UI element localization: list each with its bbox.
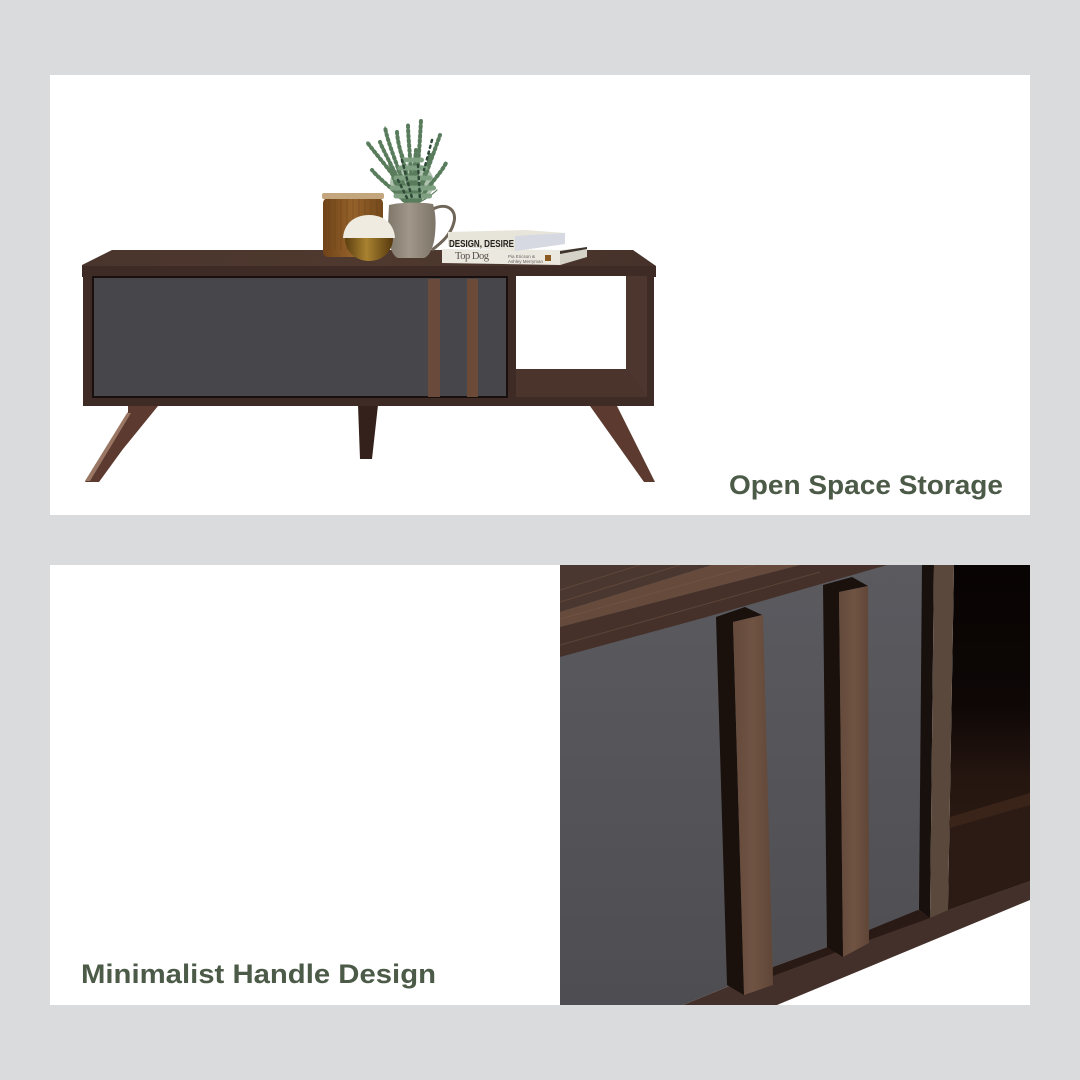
door handles: [428, 279, 478, 397]
caption: open space storage: Open Space Storage: [729, 470, 1003, 500]
caption: minimalist handle design: Minimalist Handle Design: [81, 959, 436, 989]
panel: minimalist handle design: [50, 565, 1030, 1005]
panel: open space storage: [50, 75, 1030, 515]
bottom rail: [683, 881, 1030, 1005]
table legs: [85, 405, 655, 482]
sliding door: [92, 276, 508, 398]
table frame: [83, 276, 654, 406]
table top edge: [560, 565, 887, 657]
close-up photo: [560, 565, 1030, 1005]
book title: Design, Desire: DESIGN, DESIRE: [449, 238, 514, 250]
coffee table: [82, 250, 656, 482]
handle two: [823, 577, 869, 957]
round gold and white vase: [343, 215, 395, 261]
plant: [367, 120, 446, 204]
book title: Top Dog: Top Dog: [455, 251, 490, 262]
table top: [82, 250, 656, 268]
open shelf interior: [948, 565, 1030, 910]
open storage compartment: [516, 276, 647, 397]
gray door surface: [560, 565, 930, 1005]
divider post: [919, 565, 954, 918]
jar with lid: [322, 193, 384, 257]
stacked books: [442, 230, 587, 265]
jug: [388, 203, 455, 258]
book authors line two: Ashley Merryman: [508, 259, 544, 264]
book authors: Pia Ericson &: [508, 254, 535, 259]
coffee table scene with decor and caption: [82, 119, 1003, 500]
handle close-up photo and caption: [81, 565, 1030, 1005]
handle one: [716, 607, 773, 995]
